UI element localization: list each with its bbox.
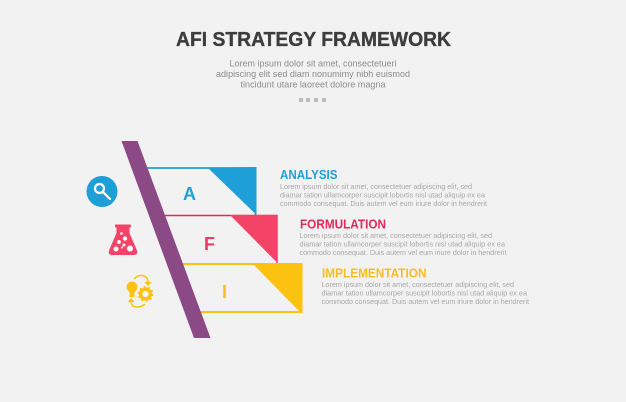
implementation triangle — [253, 264, 302, 312]
text block: analysis — [280, 168, 487, 208]
text block: implementation: diamar tation ullamcorper suscipit lobortis nisl utad aliquip ex ea — [322, 288, 527, 298]
title: AFI STRATEGY FRAMEWORK — [176, 29, 452, 51]
text block: analysis: Lorem ipsum dolor sit amet, consectetuer adipiscing elit, sed — [280, 182, 472, 191]
text block: formulation: FORMULATION — [300, 218, 386, 232]
analysis triangle — [208, 167, 256, 215]
subtitle text block: adipiscing elit sed diam nonumimy nibh euismod — [216, 69, 410, 79]
panel: implementation block — [183, 264, 302, 312]
subtitle text block: tincidunt utare laoreet dolore magna — [240, 80, 386, 90]
bulb — [126, 282, 138, 297]
text block: formulation: commodo consequat. Duis autem vel eum iriure dolor in hendrerit — [300, 248, 507, 257]
panel: analysis block — [147, 167, 256, 215]
cycle arrows — [134, 275, 148, 283]
text block: formulation: Lorem ipsum dolor sit amet, consectetuer adipiscing elit, sed — [300, 231, 492, 240]
panel: formulation block — [165, 215, 278, 263]
subtitle text block — [216, 58, 410, 90]
text block: analysis: ANALYSIS — [280, 168, 338, 182]
text block: implementation: IMPLEMENTATION — [322, 266, 426, 280]
subtitle text block: Lorem ipsum dolor sit amet, consectetueri — [230, 58, 396, 68]
icon: magnifier — [86, 176, 118, 207]
icon: flask — [109, 224, 137, 255]
letter F: F — [204, 234, 215, 254]
text block: implementation — [322, 266, 529, 306]
text block: implementation: Lorem ipsum dolor sit amet, consectetuer adipiscing elit, sed — [322, 280, 514, 289]
gear — [141, 289, 150, 299]
text block: formulation — [300, 218, 507, 257]
text block: analysis: commodo consequat. Duis autem vel eum iriure dolor in hendrerit — [280, 199, 487, 208]
text block: implementation: commodo consequat. Duis autem vel eum iriure dolor in hendrerit — [322, 297, 529, 306]
text block: analysis: diamar tation ullamcorper suscipit lobortis nisl utad aliquip ex ea — [280, 190, 485, 200]
purple slanted bar — [122, 141, 210, 338]
title pagination dots — [299, 98, 326, 102]
letter A: A — [183, 184, 196, 204]
letter I: I — [222, 282, 227, 302]
icon: idea and gear cycle — [126, 275, 152, 307]
formulation triangle — [230, 215, 278, 263]
text block: formulation: diamar tation ullamcorper suscipit lobortis nisl utad aliquip ex ea — [300, 240, 505, 248]
